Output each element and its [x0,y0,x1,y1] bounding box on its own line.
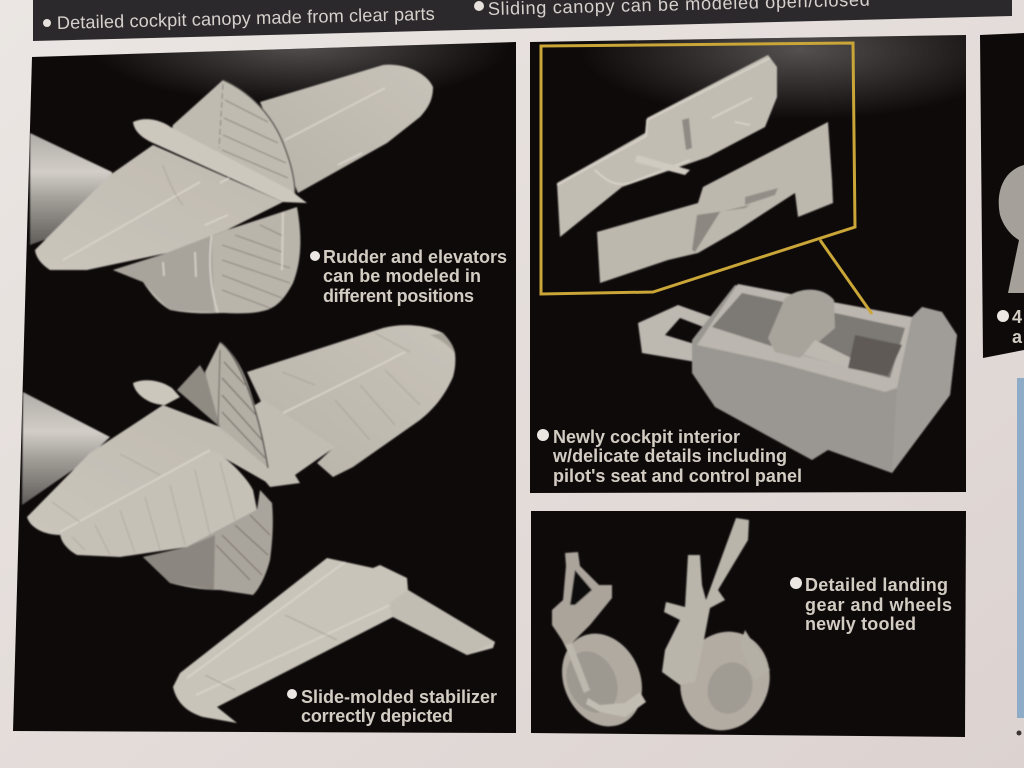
callout: cockpit interior [537,427,802,486]
tail assembly: middle [22,325,455,595]
callout: rudder and elevators: Rudder and elevators [323,247,507,267]
cockpit side wall lower [597,122,833,283]
callout: cockpit interior: Newly cockpit interior [553,427,740,447]
panel: cropped right panel: a [1012,327,1023,347]
small dark dot [1016,730,1022,736]
panel: cropped blue panel [1017,378,1024,718]
left landing gear [547,552,657,740]
yellow detail frame [541,43,855,294]
far stabilizer upper [260,65,433,193]
callout: rudder and elevators: different positions [323,286,474,306]
callout: cockpit interior: pilot's seat and control panel [553,466,802,486]
panel: cropped right panel: 4 [1012,307,1022,327]
near stabilizer upper [35,145,283,270]
callout: stabilizer: correctly depicted [301,706,453,726]
tail assembly: upper [30,65,433,313]
fin fairing upper [133,119,307,203]
lower fin middle [143,490,273,595]
cockpit interior [712,293,905,378]
main fin middle [177,342,268,468]
plate and fin root middle [220,400,335,487]
lower fin upper [113,207,300,313]
yellow leader line [820,240,872,314]
top caption strip: Detailed cockpit canopy made from clear parts [57,4,435,33]
callout: rudder and elevators [310,247,507,306]
panel: cockpit interior [530,35,966,493]
callout: landing gear: Detailed landing [805,575,948,595]
cockpit rim [697,284,912,392]
callout: rudder and elevators: can be modeled in [323,266,481,286]
callout: stabilizer [287,687,497,726]
panel: landing gear [531,511,966,743]
callout: landing gear: newly tooled [805,614,916,634]
far stabilizer middle [247,325,455,477]
fuselage stub upper [30,133,112,245]
callout: landing gear [790,575,952,634]
bulb middle [133,380,180,405]
cockpit tub [638,284,957,473]
cockpit body [692,285,957,473]
near stabilizer middle [27,405,268,557]
callout: stabilizer: Slide-molded stabilizer [301,687,497,707]
right landing gear [662,518,783,743]
panel: cropped right panel [980,33,1024,358]
callout: cockpit interior: w/delicate details including [552,446,787,466]
cockpit side wall upper [557,55,777,237]
fuselage stub middle [22,392,110,505]
callout: landing gear: gear and wheels [805,595,952,615]
stabilizer part [173,558,495,723]
panel: tail assemblies [13,0,516,733]
cockpit nose struts [638,305,712,362]
main fin upper [170,80,295,195]
top caption strip [33,0,1012,41]
